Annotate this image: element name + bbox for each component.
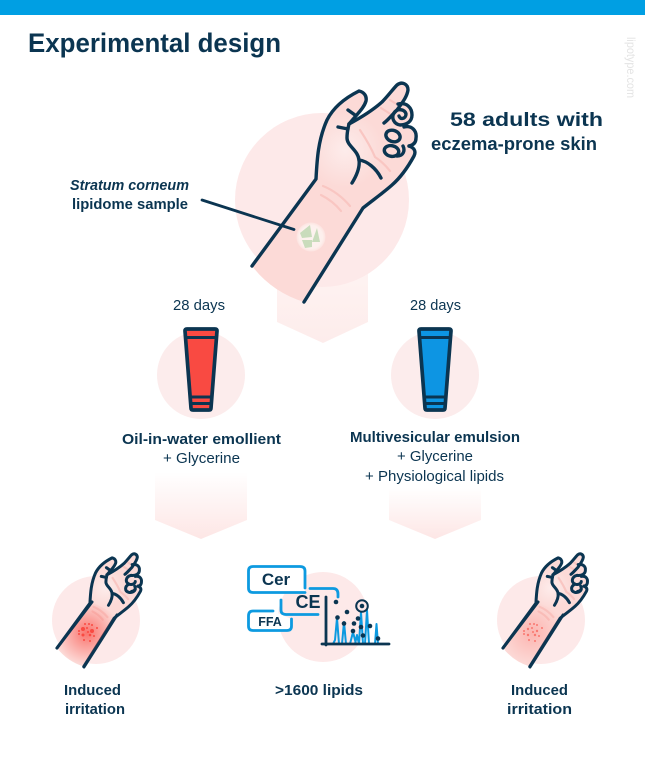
label: 28 days right: 28 days [410,298,461,314]
label: lipids count: >1600 lipids [275,682,363,699]
icon: blue tube [419,329,451,410]
text: oil-in-water emollient [122,431,281,467]
text: oil-in-water emollient: Oil-in-water emollient [122,431,281,448]
box: CE: CE [295,592,321,612]
arrow: right [389,488,481,539]
box: Cer: Cer [262,570,291,589]
label: induced irritation left: Induced [64,682,121,699]
text: multivesicular emulsion: + Physiological lipids [365,469,504,485]
text: multivesicular emulsion [350,429,520,485]
heading: 58 adults: 58 adults with [450,109,603,131]
icon: main hand with sample [252,83,416,302]
heading: 58 adults [431,109,603,154]
label: stratum corneum: Stratum corneum [70,178,189,194]
icon: hand [57,554,142,667]
panel: red tube [157,329,245,419]
skin sample patch [296,222,326,252]
title: Experimental design [28,28,281,58]
panel: irritated hand left [52,554,142,667]
box: FFA: FFA [258,615,282,629]
label: induced irritation right: Induced [511,682,568,699]
box: CE [281,588,338,614]
irritation dots [78,623,98,642]
irritation dots [523,623,543,642]
box: Cer [248,566,305,592]
label: stratum corneum [70,178,189,213]
panel: blue tube [391,329,479,419]
background circle: main hand [235,113,409,287]
label: induced irritation left: irritation [65,701,125,718]
irritation glow [61,604,113,663]
chart: lipid spectrum [322,597,389,645]
box: FFA [248,611,292,630]
label: 28 days left: 28 days [173,298,225,314]
hand outline over glow [57,602,117,667]
text: oil-in-water emollient: + Glycerine [163,451,240,467]
watermark: lipotype.com: lipotype.com [624,37,638,98]
hand outline over glow [503,602,563,667]
label: induced irritation right [507,682,572,718]
heading: 58 adults: eczema-prone skin [431,133,597,154]
icon: hand [503,554,588,667]
label: induced irritation left [64,682,125,718]
panel: lipid analysis [248,566,389,662]
text: multivesicular emulsion: + Glycerine [397,449,473,465]
arrow: from sample down [277,270,368,343]
icon: red tube [185,329,217,410]
top bar [0,0,645,15]
irritation glow [509,608,557,660]
label: stratum corneum: lipidome sample [72,197,188,213]
label: induced irritation right: irritation [507,701,572,718]
text: multivesicular emulsion: Multivesicular emulsion [350,429,520,446]
panel: irritated hand right [497,554,588,667]
pointer line [202,200,294,230]
arrow: left [155,472,247,539]
